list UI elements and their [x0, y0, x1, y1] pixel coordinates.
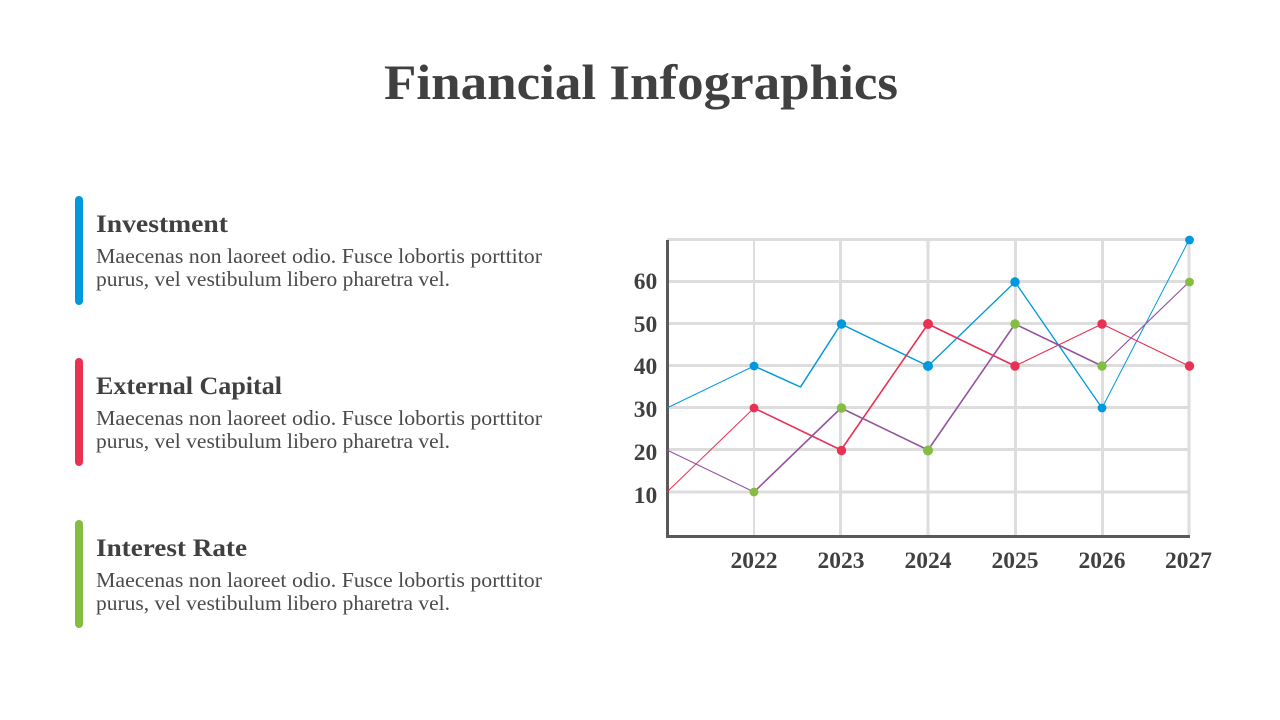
- series: blue line: [667, 240, 1189, 408]
- external capital description: purus, vel vestibulum libero pharetra vel.: [96, 429, 450, 453]
- interest rate description: [96, 568, 542, 615]
- x axis labels: 2023: [818, 548, 864, 574]
- panel: interest rate: [75, 520, 542, 628]
- external capital heading: External Capital: [96, 371, 282, 400]
- y axis labels: 10: [634, 483, 657, 509]
- y axis labels: 20: [634, 440, 657, 466]
- investment description: Maecenas non laoreet odio. Fusce lobortis porttitor: [96, 244, 542, 268]
- blue data points: [750, 236, 1194, 412]
- x axis labels: [730, 548, 1212, 574]
- chart axes: [668, 240, 1190, 536]
- y axis labels: 50: [634, 312, 657, 338]
- x axis labels: 2024: [904, 548, 952, 574]
- investment description: purus, vel vestibulum libero pharetra vel.: [96, 267, 450, 291]
- title: Financial Infographics: [384, 54, 898, 110]
- y axis labels: 60: [634, 269, 657, 295]
- series: red line: [667, 324, 1189, 492]
- interest rate heading: Interest Rate: [96, 533, 247, 562]
- y axis labels: [634, 269, 657, 509]
- panel: investment: [75, 196, 542, 305]
- x axis labels: 2025: [992, 548, 1038, 574]
- external capital accent bar: [75, 358, 83, 466]
- red data points: [750, 319, 1194, 455]
- investment accent bar: [75, 196, 83, 305]
- external capital description: [96, 406, 542, 453]
- interest rate accent bar: [75, 520, 83, 628]
- green data points: [750, 278, 1194, 496]
- series: purple line: [667, 282, 1189, 492]
- panel: external capital: [75, 358, 542, 466]
- interest rate description: Maecenas non laoreet odio. Fusce lobortis porttitor: [96, 568, 542, 592]
- x axis labels: 2026: [1078, 548, 1126, 574]
- external capital description: Maecenas non laoreet odio. Fusce lobortis porttitor: [96, 406, 542, 430]
- interest rate description: purus, vel vestibulum libero pharetra vel.: [96, 591, 450, 615]
- x axis labels: 2027: [1165, 548, 1212, 574]
- line chart: [634, 236, 1212, 574]
- y axis labels: 30: [634, 397, 657, 423]
- investment description: [96, 244, 542, 291]
- investment heading: Investment: [96, 209, 229, 238]
- x axis labels: 2022: [730, 548, 778, 574]
- y axis labels: 40: [634, 354, 657, 380]
